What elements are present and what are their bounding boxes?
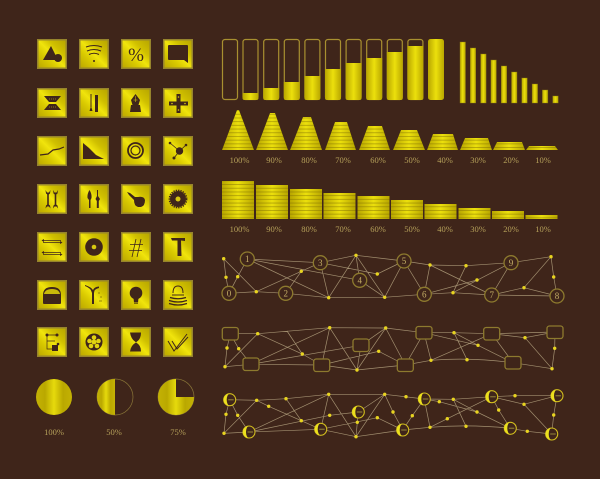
icon: wifi — [79, 39, 109, 69]
network: numbered circles: 7 — [489, 290, 494, 300]
icon: watering can — [121, 184, 151, 214]
network: numbered circles: 6 — [422, 290, 427, 300]
descending thin bars — [460, 42, 558, 103]
icon: hourglass blocks — [37, 88, 67, 118]
icon: triangle and circle — [37, 39, 67, 69]
pie labels — [44, 427, 186, 437]
stepped bar percent labels: 70% — [335, 224, 351, 234]
icon grid — [37, 39, 193, 357]
trapezoid percent labels: 90% — [266, 155, 282, 165]
network: numbered circles: 4 — [357, 276, 362, 286]
stepped bar percent labels: 10% — [535, 224, 551, 234]
icon: disc — [79, 232, 109, 262]
icon: speech bubble — [163, 39, 193, 69]
icon: percent: % — [128, 45, 144, 66]
network: numbered circles: 1 — [245, 254, 250, 264]
network: numbered circles — [222, 252, 564, 303]
icon: hammer — [163, 232, 193, 262]
icon: T shape with marks — [79, 280, 109, 310]
icon: concentric rings — [121, 136, 151, 166]
network: crescent circles — [222, 390, 563, 440]
stepped bar percent labels: 80% — [301, 224, 317, 234]
network: numbered circles: 0 — [227, 288, 232, 298]
trapezoid percent labels: 40% — [437, 155, 453, 165]
trapezoid percent labels: 70% — [335, 155, 351, 165]
pie labels: 50% — [106, 427, 122, 437]
icon: two vertical tools — [79, 88, 109, 118]
trapezoid percent labels: 50% — [404, 155, 420, 165]
icon: double check — [163, 327, 193, 357]
stepped bar percent labels: 40% — [437, 224, 453, 234]
trapezoid percent labels: 20% — [503, 155, 519, 165]
pie: 100% — [36, 379, 72, 415]
trapezoid percent labels: 100% — [230, 155, 249, 165]
icon: flower in circle — [79, 327, 109, 357]
icon: plus — [163, 88, 193, 118]
striped trapezoid chart — [222, 110, 558, 150]
stepped bar percent labels: 100% — [230, 224, 249, 234]
pie labels: 100% — [44, 427, 64, 437]
icon: bishop — [121, 88, 151, 118]
stepped bar percent labels — [230, 224, 551, 234]
network: numbered circles: 9 — [509, 258, 514, 268]
icon: percent — [121, 39, 151, 69]
stepped bar percent labels: 30% — [470, 224, 486, 234]
icon: stacked arcs — [163, 280, 193, 310]
icon: light bulb — [121, 280, 151, 310]
network: rounded boxes — [222, 326, 563, 372]
trapezoid percent labels: 60% — [370, 155, 386, 165]
stepped bar percent labels: 20% — [503, 224, 519, 234]
icon: arrows — [37, 232, 67, 262]
icon: descending area — [79, 136, 109, 166]
battery level bars — [222, 39, 444, 100]
icon: molecule — [163, 136, 193, 166]
icon: hash — [121, 232, 151, 262]
icon: flow diagram — [37, 327, 67, 357]
trapezoid percent labels — [230, 155, 551, 165]
network: numbered circles: 3 — [318, 258, 323, 268]
icon: line chart — [37, 136, 67, 166]
trapezoid percent labels: 80% — [301, 155, 317, 165]
icon: saw blade — [163, 184, 193, 214]
stepped bar percent labels: 60% — [370, 224, 386, 234]
icon: hourglass — [121, 327, 151, 357]
striped stepped bar chart — [222, 181, 558, 219]
trapezoid percent labels: 10% — [535, 155, 551, 165]
pie: 50% — [97, 379, 133, 415]
pie: 75% — [158, 379, 194, 415]
stepped bar percent labels: 90% — [266, 224, 282, 234]
trapezoid percent labels: 30% — [470, 155, 486, 165]
icon: wrenches — [37, 184, 67, 214]
icon: bag — [37, 280, 67, 310]
network: numbered circles: 8 — [555, 291, 560, 301]
network: numbered circles: 5 — [402, 256, 407, 266]
stepped bar percent labels: 50% — [404, 224, 420, 234]
network: numbered circles: 2 — [283, 288, 288, 298]
pie labels: 75% — [170, 427, 186, 437]
icon: chisels — [79, 184, 109, 214]
